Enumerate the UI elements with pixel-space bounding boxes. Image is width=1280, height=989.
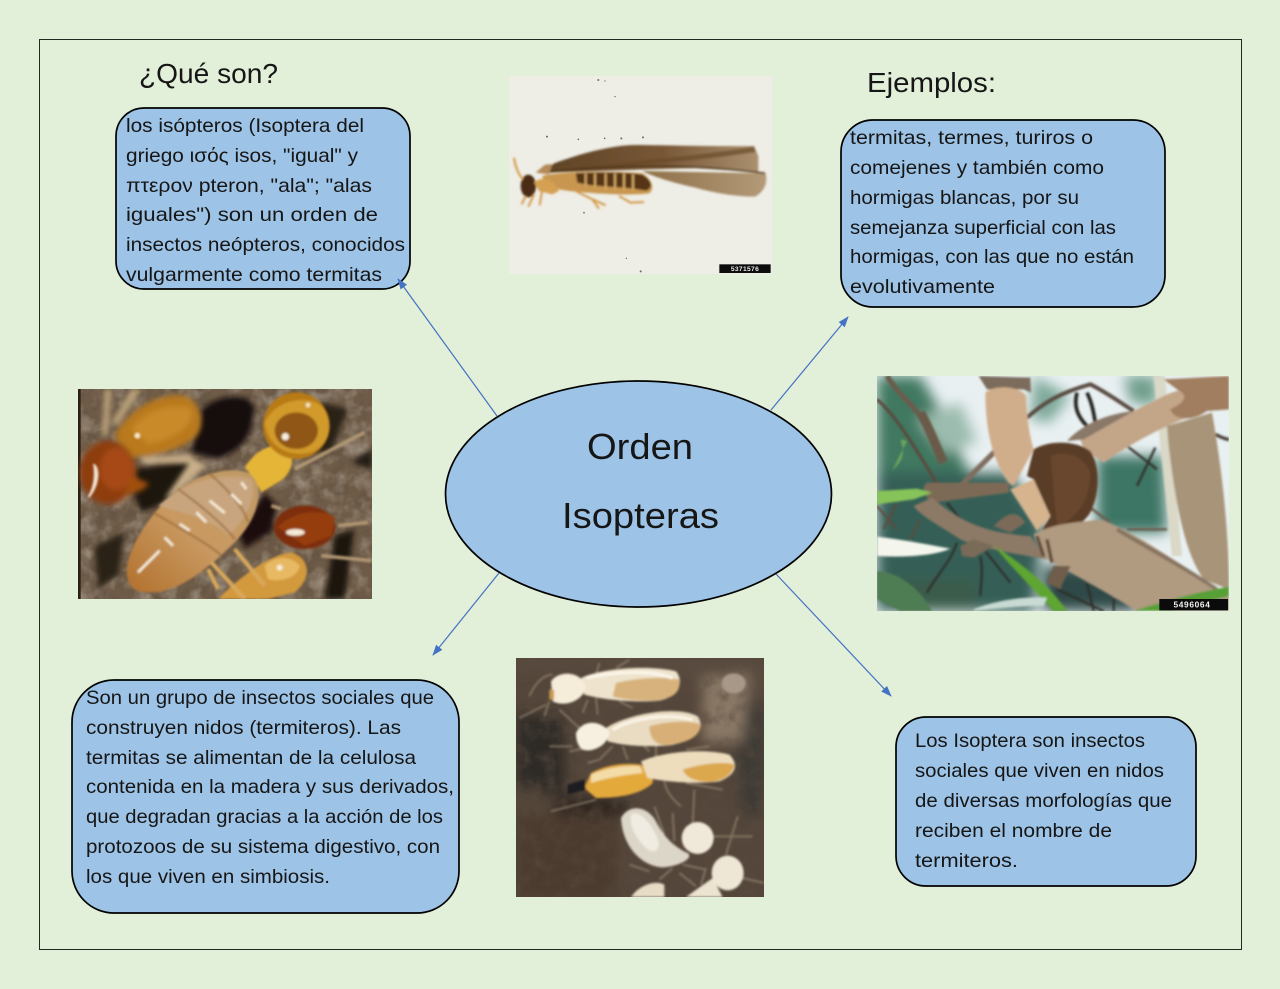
diet text: construyen nidos (termiteros). Las (86, 717, 401, 739)
diet text: contenida en la madera y sus derivados, (86, 776, 454, 798)
arrow: to examples (771, 317, 848, 410)
arrow: to diet panel (433, 573, 499, 655)
examples text: termitas, termes, turiros o (850, 127, 1093, 149)
definition text (126, 115, 405, 286)
diet text: los que viven en simbiosis. (86, 866, 330, 888)
diet text: que degradan gracias a la acción de los (86, 806, 443, 828)
nests text (915, 730, 1172, 872)
examples text (850, 127, 1134, 298)
heading: Ejemplos: Ejemplos: (867, 67, 996, 98)
arrow: to definition (398, 279, 497, 416)
examples text: hormigas blancas, por su (850, 187, 1079, 209)
definition text: griego ισός isos, "igual" y (126, 145, 358, 167)
nests text: Los Isoptera son insectos (915, 730, 1145, 752)
definition text: vulgarmente como termitas (126, 264, 382, 286)
panel: nests (896, 717, 1196, 886)
photo: nest on tree (877, 376, 1229, 611)
photo: nest on tree: 5496064 (1173, 600, 1211, 610)
nests text: de diversas morfologías que (915, 790, 1172, 812)
examples text: semejanza superficial con las (850, 217, 1116, 239)
examples text: comejenes y también como (850, 157, 1104, 179)
panel: definition (116, 108, 410, 289)
photo: winged termite: 5371576 (731, 266, 759, 273)
central oval: Orden Isopteras: Orden (587, 426, 693, 467)
definition text: los isópteros (Isoptera del (126, 115, 364, 137)
nests text: termiteros. (915, 850, 1018, 872)
photo: pale termites on bark (516, 658, 764, 897)
diet text (86, 687, 454, 888)
central oval: Orden Isopteras (446, 381, 832, 607)
diet text: Son un grupo de insectos sociales que (86, 687, 434, 709)
nests text: sociales que viven en nidos (915, 760, 1164, 782)
photo: winged termite (509, 76, 772, 274)
heading: ¿Qué son?: ¿Qué son? (139, 58, 278, 89)
central oval: Orden Isopteras: Isopteras (562, 495, 719, 536)
definition text: insectos neópteros, conocidos (126, 234, 405, 256)
photo: termites close-up with queen (78, 389, 372, 599)
examples text: hormigas, con las que no están (850, 246, 1134, 268)
definition text: πτερον pteron, "ala"; "alas (126, 175, 372, 197)
panel: examples (841, 120, 1165, 307)
diet text: termitas se alimentan de la celulosa (86, 747, 416, 769)
panel: social insects and diet (72, 680, 459, 913)
definition text: iguales") son un orden de (126, 204, 378, 226)
arrow: to nests panel (776, 574, 891, 696)
diet text: protozoos de su sistema digestivo, con (86, 836, 440, 858)
nests text: reciben el nombre de (915, 820, 1112, 842)
examples text: evolutivamente (850, 276, 995, 298)
